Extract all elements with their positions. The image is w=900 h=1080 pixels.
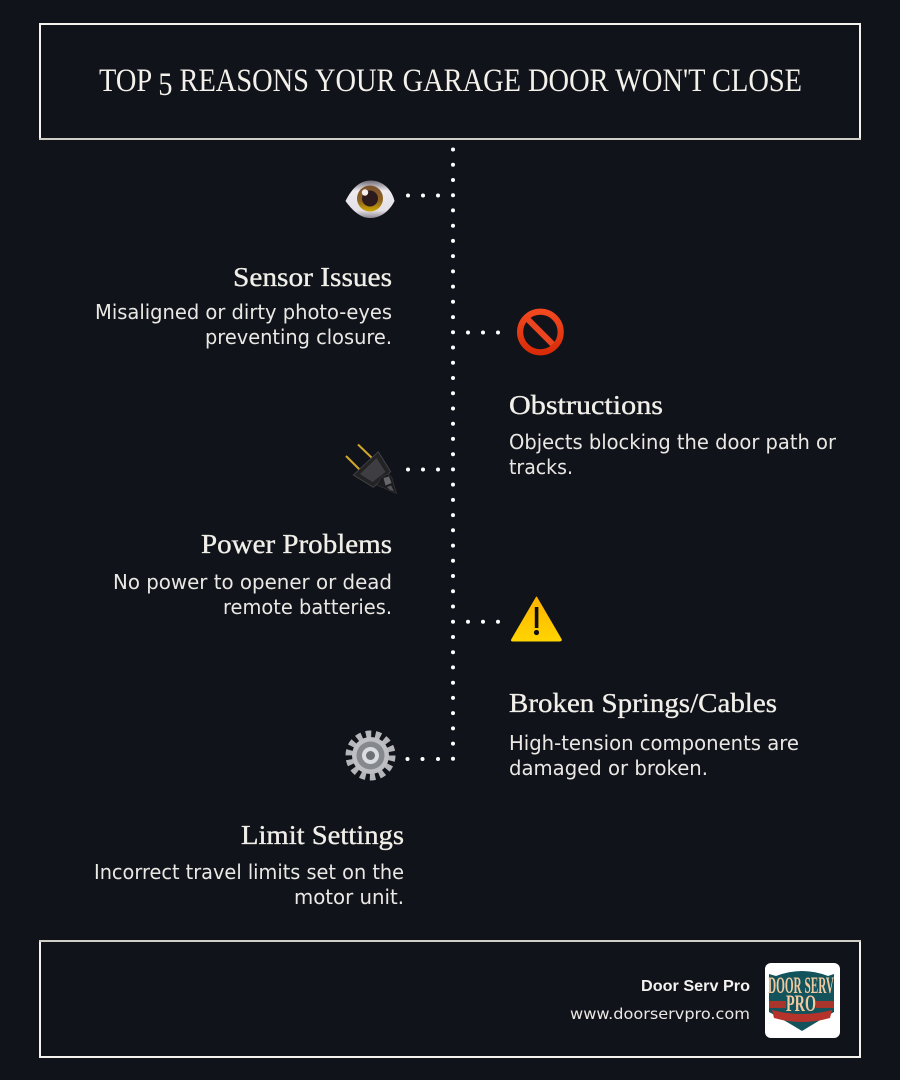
description: Broken Springs/Cables: damaged or broken. <box>509 756 708 780</box>
footer panel <box>39 941 861 1057</box>
description: Obstructions: Objects blocking the door path or <box>509 430 837 454</box>
description: Sensor Issues: Misaligned or dirty photo-eyes <box>95 300 392 324</box>
heading: Obstructions: Obstructions <box>509 390 663 420</box>
heading: Broken Springs/Cables: Broken Springs/Cables <box>509 688 777 718</box>
icon: gear <box>349 734 392 777</box>
description: Broken Springs/Cables: High-tension components are <box>509 731 799 755</box>
title: TOP <box>99 63 160 99</box>
heading: Sensor Issues: Sensor Issues <box>233 262 392 292</box>
logo: PRO <box>786 991 816 1016</box>
item: Limit Settings <box>94 734 440 909</box>
item: Power Problems <box>113 444 440 619</box>
description: Sensor Issues <box>95 300 392 349</box>
description: Sensor Issues: preventing closure. <box>205 325 392 349</box>
dotted timeline <box>451 148 455 761</box>
connector: power <box>406 468 440 472</box>
connector: sensor <box>406 194 440 198</box>
description: Limit Settings <box>94 860 404 909</box>
title: REASONS YOUR GARAGE DOOR WON'T CLOSE <box>172 63 802 99</box>
logo: DOOR SERV <box>768 973 834 998</box>
connector: obstructions <box>466 330 500 334</box>
item: Obstructions <box>466 312 837 479</box>
brand name: Door Serv Pro <box>641 978 750 995</box>
description: Power Problems <box>113 570 392 619</box>
heading: Limit Settings: Limit Settings <box>241 820 404 850</box>
description: Obstructions <box>509 430 837 479</box>
icon: prohibited <box>520 312 561 352</box>
icon: electric plug <box>346 444 396 494</box>
website: www.doorservpro.com <box>570 1005 750 1023</box>
item: Broken Springs/Cables <box>466 597 799 780</box>
description: Power Problems: No power to opener or dead <box>113 570 392 594</box>
description: Broken Springs/Cables <box>509 731 799 780</box>
connector: limit <box>406 757 440 761</box>
description: Power Problems: remote batteries. <box>223 595 392 619</box>
logo <box>765 963 840 1038</box>
item: Sensor Issues <box>95 180 440 349</box>
description: Limit Settings: motor unit. <box>294 885 404 909</box>
connector: springs <box>466 620 500 624</box>
icon: warning <box>511 597 561 641</box>
title: 5 <box>158 67 172 103</box>
description: Obstructions: tracks. <box>509 455 573 479</box>
header panel <box>39 24 861 139</box>
icon: eye <box>346 180 394 218</box>
heading: Power Problems: Power Problems <box>201 529 392 559</box>
description: Limit Settings: Incorrect travel limits set on the <box>94 860 404 884</box>
